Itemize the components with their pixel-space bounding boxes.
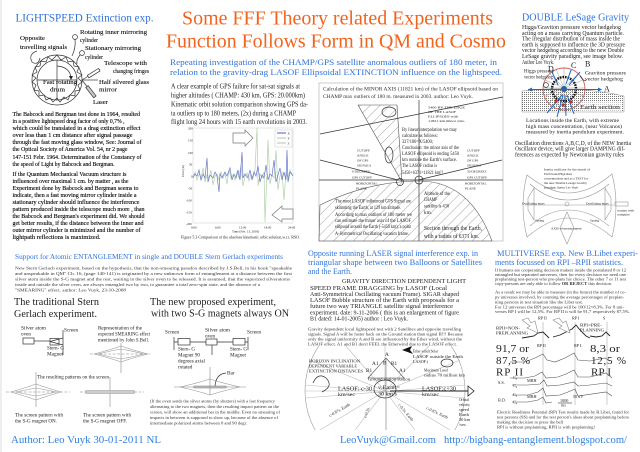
- chart: readiness potential traces: C₃: [513, 392, 518, 397]
- text block: Babcock and Bergman test: the speed of Light by Babcock and Bergman.: [12, 161, 115, 168]
- diagram: LeSage earth section: B: [585, 60, 590, 68]
- text block: gravity direction: LASOF Bubble structure of the Earth with proposals for a: [310, 297, 459, 304]
- diagram: rotating mirror drum: Half silvered glass: [99, 79, 150, 86]
- diagram: LASOF ellipsoid minor axis calculation: ANGLE: [357, 154, 368, 158]
- diagram: inertia oscillator device: Spring: [590, 218, 599, 222]
- diagram: LASOF ellipsoid minor axis calculation: CUTOFF: [357, 148, 370, 152]
- diagram: two-magnet S-G setup: Stern- G: [230, 346, 247, 352]
- diagram: LASOF ellipsoid minor axis calculation: A-Symmetrical Oscillating vacuum frame.: [335, 232, 409, 237]
- diagram: LASOF triangle signal test: HORIZON INCLINATION: [309, 358, 360, 364]
- diagram: LASOF triangle signal test: Ground station station: [368, 376, 411, 382]
- diagram: rotating mirror drum: Opposite: [20, 35, 45, 42]
- diagram: LASOF triangle signal test: radius 70 million km: [424, 372, 466, 378]
- chart: kinematic orbit outliers: 100: [188, 151, 193, 155]
- text block: quantum mechanical vacuum: influenced over maximal 1 cm. by matter , as the: [12, 178, 129, 185]
- diagram: LASOF ellipsoid minor axis calculation: 327/180=X/5400;: [402, 139, 433, 145]
- diagram: LASOF ellipsoid minor axis calculation: Altitude of the: [424, 192, 451, 197]
- diagram: LASOF triangle signal test: LASOF:c+30: [422, 386, 456, 392]
- diagram: inertia oscillator device: Spring: [535, 218, 544, 222]
- text block: quantum mechanical vacuum: [12, 171, 145, 241]
- subtitle: Repeating investigation of the CHAMP/GPS satellite anomalous outliers of 180 meter, in: [170, 57, 498, 67]
- chart: readiness potential traces: B.D.: [498, 398, 506, 402]
- chart: readiness potential traces: RP II: [538, 316, 547, 320]
- diagram: LASOF triangle signal test: [304, 345, 474, 430]
- chart: readiness potential traces: [496, 316, 626, 408]
- text block: oven shutters: intermediate polarized atoms between 0 and 90 degr.: [150, 420, 247, 426]
- diagram: rotating mirror drum: travelling signals: [20, 44, 68, 51]
- diagram: LASOF ellipsoid minor axis calculation: HORIZONTAL: [465, 182, 487, 186]
- diagram: two-magnet S-G setup: [165, 328, 262, 370]
- diagram: LASOF triangle signal test: velocity: [459, 402, 471, 407]
- text block: Babcock and Bergman test: The Babcock and Bergman test done in 1964, resulted: [12, 111, 141, 118]
- diagram: traditional S-G setup: Silver atom: [21, 326, 46, 332]
- text block: Stern Gerlach hypothesis: inside and outside the silver oven, are always entangled two by two, to guarantee a total zero-spin state, and the absence of a: [15, 282, 260, 288]
- text block: gravity direction: Anti-Symmetrical Oscillating vacuum Frame). SIGAR shaped: [310, 291, 459, 298]
- text block: Stern Gerlach hypothesis: and unspeakable in QM" Ch. 16, (page 140-141) is originated by a new unknown form of entanglement at a distance between the first: [15, 271, 293, 277]
- text block: mass locations: Locations inside the Earth, with extreme: [526, 118, 620, 124]
- text block: Higgs graviton hedgehog: earth is supposed to influence the 3D pressure: [522, 42, 625, 48]
- diagram: LASOF ellipsoid minor axis calculation: CUTOFF: [467, 148, 480, 152]
- diagram: LASOF triangle signal test: B1: [391, 361, 398, 367]
- text block: Stern Gerlach hypothesis: "SMEARING" effect. author: Leo Vuyk, 23-10-2008: [15, 288, 127, 294]
- diagram: rotating mirror drum: drum: [50, 86, 65, 94]
- text block: oven shutters: alternating to the two magnets, then the resulting impact pattern on the: [150, 404, 279, 410]
- diagram: inertia oscillator device: Earth bound High mass: [544, 172, 573, 176]
- heading: traditional experiment: Gerlach experiment.: [14, 309, 97, 320]
- chart: readiness potential traces: 91,7 or: [496, 343, 529, 355]
- diagram: LASOF triangle signal test: Ether wind (Solar: [413, 348, 438, 354]
- diagram: rotating mirror drum: Stationary mirroring: [85, 45, 141, 52]
- chart: readiness potential traces: C₄: [513, 383, 518, 388]
- diagram: LeSage earth section: Higgs pressure: [524, 70, 555, 74]
- text block: GPS failure: A clear example of GPS failure for sat-sat signals at: [171, 82, 300, 90]
- text block: quantum mechanical vacuum: pattern produced inside the telescope much more , than: [12, 206, 145, 213]
- heading: multiverse experiment: [495, 248, 638, 267]
- diagram: LASOF triangle signal test: EXTINCTION DISTANCES: [309, 368, 364, 374]
- diagram: rotating mirror drum: mirror: [99, 86, 117, 94]
- text block: Higgs graviton hedgehog: acting on a mass carrying Quantum particle.: [522, 31, 625, 37]
- diagram: LASOF ellipsoid minor axis calculation: The most LASOF influenced GPS Signal are: [335, 200, 412, 204]
- heading: multiverse experiment: MULTIVERSE exp. New B.Libet experi-: [497, 248, 638, 258]
- diagram: inertia oscillator device: concentrations and as a TEST for: [544, 176, 589, 180]
- diagram: two-magnet S-G setup: rotated: [178, 364, 193, 370]
- text block: mass locations: high mass concentration, (near Volcanos): [526, 123, 622, 130]
- text block: Higgs graviton hedgehog: Higgs/Graviton pressure vector hedgehog: [522, 25, 621, 31]
- text block: quantum mechanical vacuum: get better results, if the distance between the inner and: [12, 220, 144, 227]
- chart: readiness potential traces: MRH: [527, 378, 537, 383]
- chart: kinematic orbit outliers: X: [288, 132, 290, 136]
- diagram: LASOF ellipsoid minor axis calculation: OF THE LASOF: [428, 110, 456, 114]
- diagram: LASOF ellipsoid minor axis calculation: CHAMP: [424, 198, 437, 203]
- diagram: expected smearing: expected SMEARING effect: [98, 330, 150, 338]
- text block: gravity direction: SPEED FRAME DRAGGING by LASOF (Local: [310, 285, 447, 292]
- diagram: LeSage earth section: vector hedgehog: [585, 78, 624, 82]
- diagram: LASOF ellipsoid minor axis calculation: satellite is 430: [424, 204, 449, 210]
- diagram: LASOF ellipsoid minor axis calculation: PLANE: [356, 186, 367, 190]
- diagram: LASOF triangle signal test: v.Earth=: [378, 385, 400, 391]
- diagram: inertia oscillator device: AXIS of measurement: [551, 226, 582, 230]
- text block: quantum mechanical vacuum: outer mirror cylinder is minimized and the number of: [12, 227, 141, 234]
- text block: readiness potential caption: making the decision to press the bell: [497, 420, 564, 424]
- diagram: LASOF ellipsoid minor axis calculation: CHAMP max outliers of 180 m. measured in 2003. author: Leo Vuyk.: [323, 93, 473, 100]
- diagram: LASOF ellipsoid minor axis calculation: According to max outliers of 180 meter we: [335, 213, 413, 218]
- chart: readiness potential traces: RP II: [496, 366, 523, 378]
- diagram: LASOF ellipsoid minor axis calculation: [319, 83, 503, 241]
- text block: GPS failure: [171, 82, 309, 126]
- diagram: resulting screen patterns: the S-G magnet ON.: [15, 418, 57, 424]
- diagram: LASOF triangle signal test: Maximum Lasof: [424, 368, 449, 372]
- diagram: traditional S-G setup: oven: [21, 332, 31, 338]
- text block: gravity direction: future two way TRIANGLE satellite signal interference: [310, 303, 453, 310]
- diagram: LASOF ellipsoid minor axis calculation: 5400 BY THE EDGE: [428, 106, 465, 110]
- diagram: LASOF triangle signal test: km/sec: [422, 392, 440, 398]
- diagram: LeSage earth section: [522, 60, 627, 117]
- text block: Babcock and Bergman test: [12, 111, 142, 168]
- text block: Higgs graviton hedgehog: Author Leo Vuyk.: [522, 60, 554, 66]
- text block: quantum mechanical vacuum: lightpath reflections is maximized.: [12, 234, 101, 241]
- diagram: LASOF triangle signal test: B: [383, 360, 387, 366]
- text block: Babcock and Bergman test: 147-151 Febr. 1964. Determination of the Constancy of: [12, 154, 142, 161]
- text block: quantum mechanical vacuum: If the Quantum Mechanical Vacuum structure is: [12, 171, 127, 178]
- text block: readiness potential caption: RPI is without preplanning, RPII is with preplanning!: [497, 424, 595, 430]
- chart: kinematic orbit outliers: 0: [191, 174, 193, 178]
- text block: gravity direction: experiment. date: 9-11-2006 ( this is an enlargement of figure: [310, 310, 459, 316]
- text block: Higgs graviton hedgehog: [522, 25, 625, 66]
- text block: Higgs graviton hedgehog: vector hedgehog according to the new Double: [522, 48, 624, 54]
- footer: blog address: http://bigbang-entanglement.blogspot.com/: [444, 435, 627, 446]
- diagram: expected smearing: [90, 324, 150, 373]
- diagram: resulting screen patterns: The screen pattern with: [15, 412, 63, 418]
- text block: GPS failure: flight long 24 hours with 15 earth revolutions in 2003.: [171, 118, 307, 126]
- text block: readiness potential caption: test persons (SS) and for the test person's ideas about preplanning before: [497, 414, 629, 420]
- chart: readiness potential traces: MRH: [527, 394, 537, 399]
- diagram: rotating mirror drum: [20, 29, 150, 106]
- diagram: LASOF triangle signal test: LASOF: c-30: [338, 386, 372, 392]
- diagram: LeSage earth section: C: [571, 61, 576, 70]
- diagram: LASOF ellipsoid minor axis calculation: The LASOF radius is: [402, 163, 437, 169]
- diagram: LeSage earth section: vector hedgehog: [524, 76, 553, 80]
- text block: decision makers: As a result we may be able to measure (in the future) the number of co-: [495, 290, 626, 294]
- diagram: LASOF ellipsoid minor axis calculation: SIGNALS: [467, 164, 481, 168]
- diagram: LASOF triangle signal test: LASOF.): [413, 359, 429, 364]
- chart: kinematic orbit outliers: [181, 126, 300, 240]
- diagram: inertia oscillator device: Oscillating mass: [586, 202, 609, 206]
- diagram: traditional S-G setup: Magnet: [47, 352, 64, 358]
- text block: mass locations: measured by inertia pendulum experiment.: [526, 130, 625, 136]
- text block: Stern Gerlach hypothesis: [15, 266, 293, 294]
- diagram: LASOF triangle signal test: c-0.87s. Earth: [328, 401, 352, 418]
- diagram: LASOF triangle signal test: c-0.87s. Earth: [426, 405, 450, 420]
- chart: kinematic orbit outliers: -150: [186, 210, 192, 214]
- heading: lightspeed extinction experiment: LIGHTSPEED Extinction exp.: [16, 12, 154, 24]
- chart: readiness potential traces: RP I: [572, 316, 580, 320]
- diagram: LASOF ellipsoid minor axis calculation: HORIZONTAL: [356, 182, 378, 186]
- diagram: inertia oscillator device: computer: [617, 212, 631, 216]
- text block: gravity dependent lightspeed test: signals. Signal A will be faster back on the Ground station than signal B!!! Because: [308, 332, 463, 336]
- diagram: two-magnet S-G setup: Magnet 90: [178, 352, 200, 358]
- diagram: LASOF triangle signal test: DEPENDENT VARIABLE: [309, 364, 357, 368]
- diagram: LeSage earth section: Graviton pressure: [585, 72, 627, 76]
- text block: oscillation directions: Oscillation directions A,B,C,D, of the NEW Inertia: [515, 140, 631, 147]
- chart: readiness potential traces: C₄: [513, 400, 518, 404]
- diagram: additional bar pattern: Bar: [227, 370, 235, 376]
- text block: decision makers: For 12 universes the RPI percentage will be 100/12=8,3%. For 8 uni-: [495, 304, 624, 310]
- diagram: LASOF triangle signal test: /sec.: [459, 422, 467, 427]
- diagram: LASOF ellipsoid minor axis calculation: 5450+6371=11821 km!!: [402, 170, 443, 176]
- diagram: traditional S-G setup: Screen: [64, 328, 79, 334]
- heading: opposite running laser: [308, 248, 483, 276]
- chart: kinematic orbit outliers: 12:00: [239, 226, 247, 230]
- diagram: rotating mirror drum: cylinder: [80, 37, 98, 44]
- chart: readiness potential traces: PREPLANNING: [496, 330, 528, 336]
- diagram: LASOF ellipsoid minor axis calculation: Calculation of the MINOR AXIS (11821 km) of the LASOF ellipsoid based on: [323, 86, 498, 92]
- text block: GPS failure: higher altitudes ( CHAMP: 430 km, GPS: 20.000km): [171, 92, 306, 100]
- diagram: rotating mirror drum: changing fringes: [113, 68, 150, 75]
- chart: readiness potential traces: 50 uV: [573, 394, 583, 399]
- diagram: two-magnet S-G setup: Screen: [247, 330, 262, 336]
- title: [166, 8, 506, 52]
- heading: multiverse experiment: ments focussed on RPI –RPII statistics.: [495, 257, 623, 267]
- chart: kinematic orbit outliers: Error [m]: [181, 165, 185, 177]
- chart: kinematic orbit outliers: 200: [188, 126, 193, 130]
- diagram: LASOF triangle signal test: B1: [366, 368, 373, 374]
- diagram: additional bar pattern: [174, 367, 246, 395]
- diagram: LeSage earth section: D: [548, 64, 554, 74]
- text block: Babcock and Bergman test: through the fast moving glass window, See: Journal of: [12, 139, 142, 146]
- text block: Stern Gerlach hypothesis: New Stern Gerlach experiment, based on the hypothesis, that the non-smearing paradox described by J.S.Bell, in his book "speakable: [15, 266, 292, 272]
- text block: quantum mechanical vacuum: indicate, then a fast moving mirror cylinder inside a: [12, 192, 137, 199]
- chart: kinematic orbit outliers: 50: [189, 162, 193, 166]
- diagram: LASOF triangle signal test: A: [385, 352, 389, 358]
- diagram: LASOF ellipsoid minor axis calculation: GPS CUTOFF: [352, 176, 372, 180]
- chart: kinematic orbit outliers: 0:00: [191, 226, 197, 230]
- footer: email: LeoVuyk@Gmail.com: [340, 435, 436, 446]
- text block: gravity direction: GRAVITY DIRECTION DEPENDENT LIGHT: [342, 279, 466, 285]
- chart: readiness potential traces: RP I: [591, 366, 611, 378]
- text block: gravity dependent lightspeed test: only the signal uniformity A and B are influenced by the Ether wind, without the: [308, 336, 462, 342]
- text block: Stern Gerlach hypothesis: silver atom inside the S-G magnet and the rest, waiting in the silver oven to be released. It is assumed, that the vaporized silveratoms: [15, 276, 290, 282]
- diagram: LASOF ellipsoid minor axis calculation: skimming the Earth, at 129 km altitude.: [335, 206, 401, 211]
- diagram: LASOF ellipsoid minor axis calculation: km outside the Earth's surface.: [402, 156, 457, 163]
- text block: quantum mechanical vacuum: the Babcock and Bergman's experiment did. We should: [12, 213, 145, 220]
- text block: gravity direction: B1 dated: 14-01-2005) author : Leo Vuyk.: [310, 316, 409, 322]
- heading: atomic entanglement: Support for Atomic ENTANGLEMENT in single and DOUBLE Stern Gerlach experiments: [15, 252, 283, 261]
- diagram: LASOF ellipsoid minor axis calculation: SIGNALS: [357, 164, 371, 168]
- chart: kinematic orbit outliers: Y: [288, 136, 290, 140]
- text block: Babcock and Bergman test: which could be translated in a drag extinction effect: [12, 125, 141, 132]
- diagram: rotating mirror drum: Laser: [93, 99, 108, 106]
- diagram: LeSage earth section: Earth section: [580, 104, 621, 111]
- text block: quantum mechanical vacuum: Experiment done by Babcock and Bergman seems to: [12, 185, 138, 192]
- text block: decision makers: copy-persons are only able to follow OR REJECT this decision.: [495, 281, 612, 286]
- diagram: LASOF ellipsoid minor axis calculation: 0 DEGREES: [352, 170, 370, 174]
- diagram: inertia oscillator device: Inertia oscillator for the search of: [544, 168, 591, 172]
- chart: kinematic orbit outliers: -50: [188, 186, 193, 190]
- title: Some FFF Theory related Experiments: [182, 8, 493, 30]
- heading: opposite running laser: triangular shape between two Balloons or Satellites: [308, 257, 483, 267]
- diagram: inertia oscillator device: Oscillating mass: [522, 202, 545, 206]
- chart: readiness potential traces: S.S.: [498, 380, 505, 385]
- chart: kinematic orbit outliers: 6:00: [215, 226, 221, 230]
- diagram: LASOF ellipsoid minor axis calculation: with a radius of 6371 km.: [424, 233, 479, 240]
- text block: decision makers: [495, 268, 630, 315]
- diagram: LASOF ellipsoid minor axis calculation: PLANE: [465, 186, 476, 190]
- diagram: LASOF triangle signal test: LASOF outside the Earth: [413, 354, 464, 359]
- chart: readiness potential traces: 87,5 %: [496, 355, 530, 367]
- diagram: two-magnet S-G setup: Silver atom: [205, 328, 230, 334]
- diagram: rotating mirror drum: Fast rotating: [43, 79, 77, 86]
- diagram: LASOF ellipsoid minor axis calculation: ELLIPSOID with: [428, 114, 458, 118]
- diagram: LASOF ellipsoid minor axis calculation: km.: [424, 211, 432, 216]
- chart: kinematic orbit outliers: 150: [188, 138, 193, 142]
- text block: mass locations: [526, 118, 625, 136]
- diagram: LASOF triangle signal test: 30 km/s: [378, 392, 397, 398]
- diagram: LASOF triangle signal test: A1: [372, 361, 379, 367]
- diagram: LASOF ellipsoid minor axis calculation: can estimate the minor axis of the LASOF: [335, 219, 411, 224]
- diagram: LASOF ellipsoid minor axis calculation: ellipsoid around the Earth (-5450 km), a polar: [335, 225, 411, 230]
- title: Function Follows Form in QM and Cosmo: [166, 30, 506, 52]
- diagram: LASOF ellipsoid minor axis calculation: LASOF ellipsoid is ending 5450: [402, 151, 459, 157]
- text block: decision makers: If humans are cooperating decision makers inside the postulated 8 or 12: [495, 268, 627, 272]
- diagram: two-magnet S-G setup: oven: [205, 334, 215, 340]
- diagram: LASOF triangle signal test: Earth: [459, 412, 470, 417]
- diagram: LASOF triangle signal test: 30 km: [459, 417, 471, 422]
- text block: gravity dependent lightspeed test: [306, 325, 466, 346]
- diagram: expected smearing: mentioned by John S.Bell.: [98, 338, 149, 344]
- text block: decision makers: preplanning test-person who pre-plans his choice. The other 7 or 11 test: [495, 276, 627, 282]
- diagram: LASOF triangle signal test: A1: [399, 368, 406, 374]
- subtitle: [170, 57, 502, 77]
- text block: gravity direction: [310, 279, 466, 322]
- text block: oven shutters: [150, 398, 280, 426]
- chart: readiness potential traces: ms: [561, 402, 566, 408]
- text block: GPS failure: ta outliers up to 180 meters, (2x) during a CHAMP: [171, 110, 296, 118]
- heading: double LeSage gravity: DOUBLE LeSage Gravity: [522, 12, 629, 24]
- heading: opposite running laser: Opposite running LASER signal interference exp. in: [308, 248, 479, 258]
- diagram: rotating mirror drum: Telescope with: [104, 60, 148, 67]
- diagram: expected smearing: Representation of the: [98, 324, 143, 332]
- diagram: LASOF ellipsoid minor axis calculation: 11821 km minor axis.: [428, 119, 465, 123]
- diagram: inertia oscillator device: [522, 168, 634, 244]
- footer: author: Author: Leo Vuyk 30-01-2011 NL: [11, 435, 161, 446]
- heading: traditional experiment: [14, 297, 100, 320]
- text block: oven shutters: screen, will show an additional bar in the middle. Even no smearing of: [150, 410, 280, 416]
- text block: Babcock and Bergman test: over less than 1 cm distance after signal passage: [12, 132, 133, 139]
- text block: decision makers: entangled but separated universes, then for every decision we need one: [495, 272, 626, 278]
- text block: Babcock and Bergman test: the Optical Society of America Vol. 54, nr 2 page: [12, 146, 128, 153]
- chart: readiness potential traces: C₃: [513, 375, 518, 380]
- diagram: resulting screen patterns: The resulting patterns on the screen: [37, 374, 109, 380]
- chart: kinematic orbit outliers: Time (Feb. 13, 2003): [232, 230, 259, 234]
- text block: decision makers: ning persons in test situation like the Libet test.: [495, 300, 583, 304]
- diagram: LASOF ellipsoid minor axis calculation: OF GPS: [467, 158, 479, 162]
- text block: readiness potential caption: [497, 410, 629, 430]
- text block: oscillation directions: ferences as expected by Newtonian gravity rules: [515, 152, 625, 158]
- diagram: two-magnet S-G setup: Stern- G: [178, 346, 195, 352]
- text block: oscillation directions: Oscillator device, will give larger DAMPING dif-: [515, 146, 625, 152]
- chart: readiness potential traces: PLANNING: [580, 328, 604, 332]
- chart: kinematic orbit outliers: 24:00: [288, 226, 296, 230]
- text block: readiness potential caption: Electric Readiness Potential (RP) Test results made by B.Libet, found for: [497, 410, 629, 416]
- heading: traditional experiment: The traditional Stern: [14, 297, 100, 308]
- diagram: resulting screen patterns: the S-G magnet OFF.: [83, 418, 127, 424]
- chart: readiness potential traces: 12,5 %: [591, 355, 626, 367]
- text block: decision makers: py universes involved, by counting the average percentages of preplan-: [495, 294, 624, 300]
- diagram: two-magnet S-G setup: Screen: [165, 330, 180, 336]
- diagram: LASOF triangle signal test: km/sec: [338, 392, 356, 398]
- diagram: inertia oscillator device: counter with: [617, 208, 634, 212]
- diagram: inertia oscillator device: the new Double Lesage Gravity: [544, 181, 587, 185]
- chart: kinematic orbit outliers: Figure 5.3 Comparison of the absolute kinematic orbit solution,w.r.t. RSO.: [181, 236, 300, 240]
- diagram: LASOF ellipsoid minor axis calculation: By linear interpolation we may: [402, 127, 457, 133]
- diagram: LASOF triangle signal test: c-0.5s. Earth: [397, 402, 415, 423]
- diagram: LASOF triangle signal test: Orbital: [459, 397, 470, 402]
- chart: kinematic orbit outliers: -200: [186, 222, 192, 226]
- text block: oven shutters: (If the oven sends the silver atoms (by shutters) with a fast frequency: [150, 398, 276, 404]
- diagram: traditional S-G setup: Stern- G: [47, 346, 64, 352]
- chart: readiness potential traces: RPI=PRE-: [580, 322, 603, 328]
- text block: Higgs graviton hedgehog: The irregular distribution of mass inside the: [522, 36, 620, 42]
- text block: gravity dependent lightspeed test: Gravity dependent local lightspeed test with 2 Satellites and opposite travelling: [308, 326, 462, 332]
- heading: new proposed experiment: The new proposed experiment,: [150, 297, 276, 308]
- diagram: two-magnet S-G setup: degrees axial: [178, 358, 206, 364]
- diagram: LeSage earth section: A: [604, 84, 610, 94]
- diagram: resulting screen patterns: The screen pattern with: [83, 412, 131, 418]
- diagram: rotating mirror drum: Rotating inner mirroring: [80, 29, 147, 36]
- diagram: LASOF ellipsoid minor axis calculation: calculate as follows:: [402, 132, 438, 139]
- text block: oscillation directions: [515, 140, 631, 158]
- chart: readiness potential traces: 1000: [560, 398, 568, 403]
- heading: new proposed experiment: [150, 297, 289, 320]
- diagram: LASOF ellipsoid minor axis calculation: 30 DEGREES: [467, 170, 487, 174]
- text block: GPS failure: Kinematic orbit solution comparison showing GPS da-: [171, 100, 309, 108]
- diagram: LASOF ellipsoid minor axis calculation: Conclusion: the minor axis of the: [402, 144, 460, 151]
- subtitle: relation to the gravity-drag LASOF Ellipsoidal EXTINCTION influence on the lightspeed.: [170, 67, 502, 77]
- text block: quantum mechanical vacuum: stationary cylinder should influence the interference: [12, 199, 140, 206]
- diagram: LASOF ellipsoid minor axis calculation: OF GPS: [357, 158, 369, 162]
- text block: decision makers: verses RP I will be 12,5%. For RP II it will be 91,7 respectively 87,5%.: [495, 309, 630, 315]
- text block: Higgs graviton hedgehog: LeSage gravity paradigm, see image below.: [522, 54, 624, 60]
- chart: readiness potential traces: RPII=NON-: [496, 326, 521, 330]
- diagram: resulting screen patterns: [6, 372, 144, 424]
- chart: readiness potential traces: S: [603, 316, 606, 320]
- diagram: traditional S-G setup: [21, 326, 79, 358]
- diagram: rotating mirror drum: cylinder: [85, 54, 103, 61]
- chart: readiness potential traces: RP II: [537, 343, 546, 348]
- diagram: LASOF ellipsoid minor axis calculation: GPS CUTOFF: [467, 176, 487, 180]
- chart: kinematic orbit outliers: -100: [186, 198, 192, 202]
- text block: oven shutters: impacts in between is supposed to show up, because of the absence of: [150, 415, 278, 421]
- chart: readiness potential traces: RP I: [574, 343, 582, 348]
- heading: opposite running laser: and the Earth.: [308, 266, 352, 276]
- text block: Babcock and Bergman test: in a positive lightspeed drag factor of only 0,7% ,: [12, 118, 125, 125]
- text block: gravity dependent lightspeed test: LASOF effect. A1 and B1 don't FEEL the Etherwind due to the LASOF effect.: [308, 342, 457, 346]
- chart: kinematic orbit outliers: Z: [288, 142, 290, 146]
- diagram: LASOF triangle signal test: c-0.5s.: [362, 406, 371, 418]
- heading: new proposed experiment: with two S-G magnets always ON: [151, 308, 289, 320]
- diagram: two-magnet S-G setup: Magnet: [230, 352, 247, 358]
- diagram: LASOF ellipsoid minor axis calculation: ANGLE: [467, 154, 478, 158]
- chart: kinematic orbit outliers: 18:00: [264, 226, 272, 230]
- diagram: inertia oscillator device: paradigm. Author Leo Vuyk: [544, 186, 578, 190]
- diagram: LASOF triangle signal test: speed: [459, 407, 470, 412]
- diagram: LASOF ellipsoid minor axis calculation: Section through the Earth,: [424, 226, 482, 232]
- chart: readiness potential traces: 8,3 or: [590, 343, 620, 355]
